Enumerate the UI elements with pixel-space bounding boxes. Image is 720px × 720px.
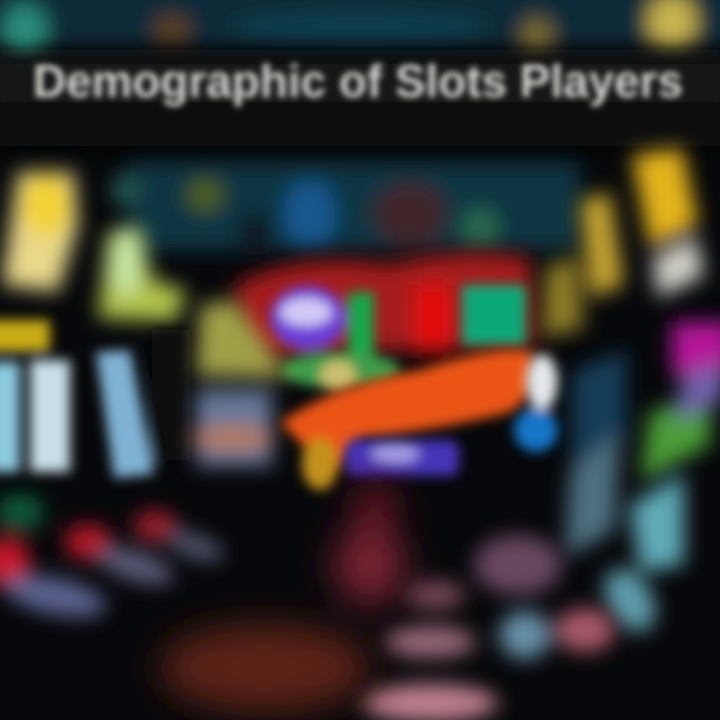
- icon: right chairs: [362, 535, 615, 720]
- icon: left machine screens: [0, 320, 190, 478]
- icon: blue purple lights: [345, 354, 558, 476]
- panel: top ceiling band: [0, 0, 720, 56]
- panel: left slot machines: [0, 172, 227, 624]
- icon: left yellow sign: [190, 300, 290, 466]
- panel: central display: [190, 253, 558, 490]
- panel: floor carpet: [160, 483, 406, 712]
- chart: red backdrop: [235, 253, 535, 358]
- icon: purple disc: [270, 285, 526, 392]
- icon: right machine screens: [565, 322, 720, 640]
- panel: back wall screens: [111, 162, 580, 255]
- panel: right slot machines: [362, 148, 720, 720]
- panel: title band: [0, 56, 720, 146]
- icon: left chairs: [0, 494, 227, 624]
- icon: left machine upper lights: [2, 172, 186, 322]
- icon: right machine lights: [542, 148, 704, 338]
- title: Demographic of Slots Players: [33, 55, 683, 107]
- arrow: orange banner: [280, 349, 535, 490]
